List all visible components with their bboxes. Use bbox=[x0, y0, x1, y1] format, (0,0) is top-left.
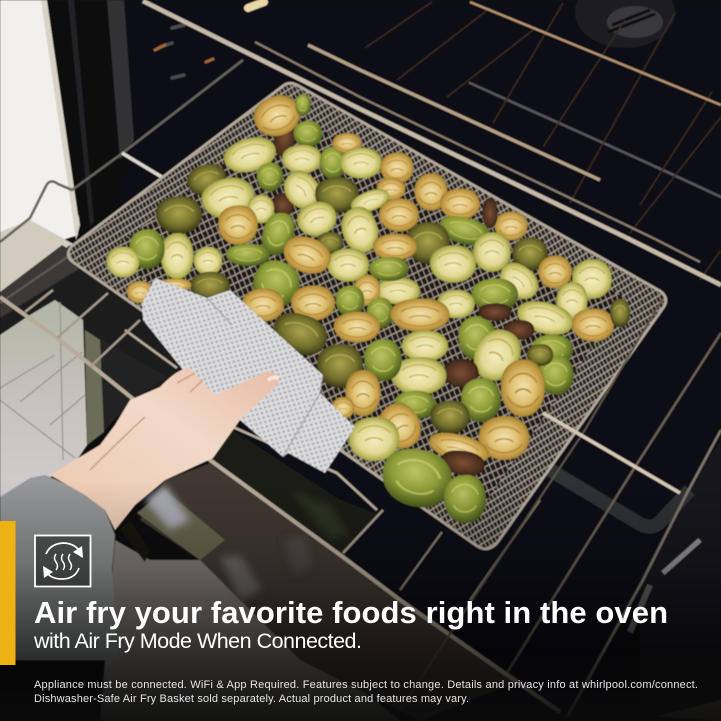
thin rack rail bbox=[255, 42, 700, 262]
lower cross wires bbox=[25, 290, 540, 600]
disclaimer line 2: Dishwasher-Safe Air Fry Basket sold separately. Actual product and features may vary. bbox=[34, 693, 469, 705]
front rack rail bbox=[143, 1, 721, 285]
light streaks on oven floor bbox=[155, 2, 721, 197]
hand bbox=[50, 368, 280, 530]
tray and right inner panel bbox=[550, 440, 721, 721]
reflected rack in glass bbox=[0, 302, 85, 460]
oven side frame bbox=[47, 0, 134, 228]
basket wall mesh bbox=[68, 83, 666, 549]
bottom right kitchen floor bbox=[650, 603, 721, 721]
brussels sprouts bbox=[106, 89, 630, 523]
subheading: with Air Fry Mode When Connected. bbox=[33, 629, 362, 653]
door glass reflection bbox=[0, 300, 87, 497]
towel bbox=[142, 278, 355, 473]
door hinge bbox=[630, 540, 700, 632]
yellow accent bar bbox=[0, 521, 16, 665]
headline: Air fry your favorite foods right in the oven bbox=[34, 595, 668, 630]
oven door dark band bbox=[0, 245, 210, 420]
door glass inner dark bbox=[85, 330, 167, 445]
fan cover reflection bbox=[575, 0, 675, 48]
basket floor mesh bbox=[108, 112, 625, 515]
towel fold bbox=[207, 298, 323, 457]
second rack rail bbox=[308, 45, 600, 180]
bottom dark gradient bbox=[0, 480, 721, 721]
sleeve bbox=[0, 475, 118, 660]
icon: air fry mode bbox=[35, 536, 90, 586]
kitchen wall seen at left bbox=[0, 0, 80, 298]
left rack rods bbox=[0, 60, 275, 303]
back rack rail bbox=[470, 2, 721, 105]
disclaimer line 1: Appliance must be connected. WiFi & App Required. Features subject to change. Details and privacy info at whirlpool.com/connect. bbox=[34, 679, 698, 691]
upper rack wires bbox=[365, 2, 721, 280]
right rack wires and rail bbox=[400, 300, 721, 717]
lower door glass reflections bbox=[100, 430, 520, 721]
basket rim bbox=[68, 83, 666, 549]
lower front rack rail bbox=[0, 297, 560, 712]
